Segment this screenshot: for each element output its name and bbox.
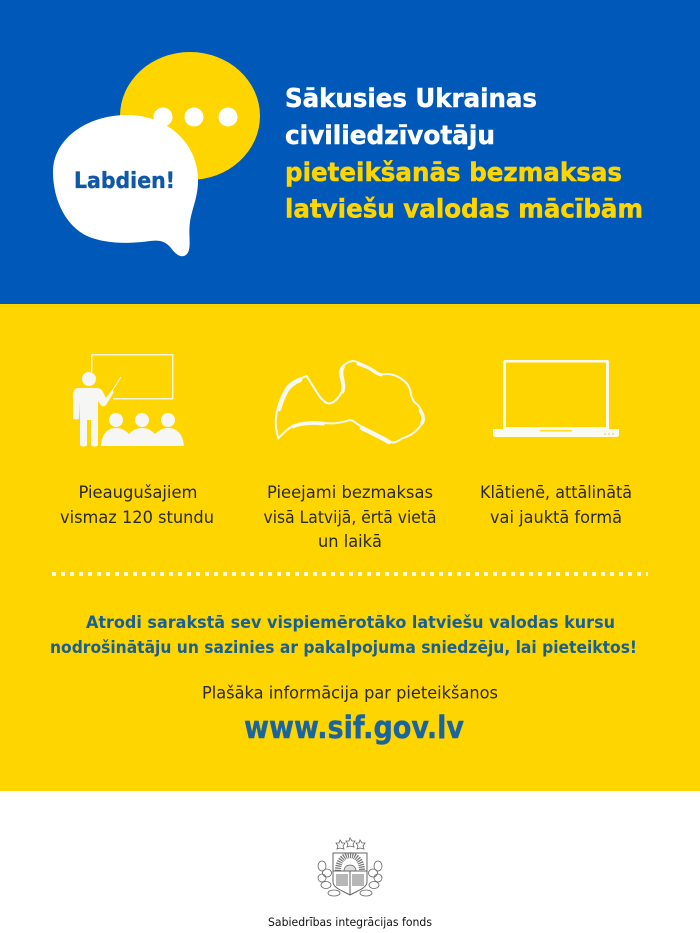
heading: Sākusies Ukrainas <box>285 84 537 114</box>
heading: pieteikšanās bezmaksas <box>285 158 622 188</box>
link: website: www.sif.gov.lv <box>244 710 464 746</box>
panel: yellow body <box>0 304 700 791</box>
icon: speech bubbles <box>53 52 260 256</box>
text: call to action: nodrošinātāju un sazinies ar pakalpojuma sniedzēju, lai pieteiktos! <box>50 638 637 657</box>
text: free across Latvia <box>264 483 436 551</box>
text: study formats: Klātienē, attālinātā <box>480 483 632 502</box>
text: free across Latvia: un laikā <box>318 532 382 551</box>
text: adults: Pieaugušajiem <box>78 483 198 502</box>
text: study formats <box>480 483 632 527</box>
logo: coat of arms <box>318 838 382 896</box>
icon: speech bubbles: Labdien! <box>74 169 175 194</box>
text: adults: vismaz 120 stundu <box>60 508 214 527</box>
icon: map of Latvia <box>276 361 423 443</box>
icon: teacher with students <box>73 355 184 446</box>
heading <box>285 84 643 224</box>
text: call to action <box>50 613 637 657</box>
icon: laptop <box>493 360 619 437</box>
heading: civiliedzīvotāju <box>285 121 495 151</box>
heading: latviešu valodas mācībām <box>285 194 643 224</box>
panel: white footer <box>0 791 700 933</box>
panel: blue header <box>0 0 700 304</box>
text: study formats: vai jauktā formā <box>490 508 622 527</box>
text: call to action: Atrodi sarakstā sev vispiemērotāko latviešu valodas kursu <box>86 613 615 632</box>
text: free across Latvia: visā Latvijā, ērtā vietā <box>264 508 436 527</box>
text: free across Latvia: Pieejami bezmaksas <box>267 483 433 502</box>
text: more information: Plašāka informācija par pieteikšanos <box>202 684 498 702</box>
text: organisation name: Sabiedrības integrācijas fonds <box>268 915 432 929</box>
text: adults <box>60 483 214 527</box>
